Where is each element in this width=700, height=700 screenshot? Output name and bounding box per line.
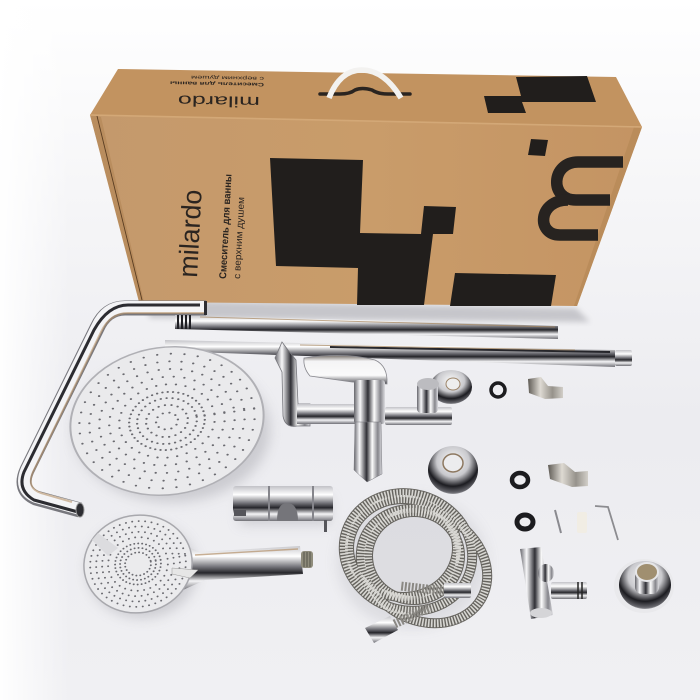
box front face xyxy=(90,115,642,306)
slider bracket xyxy=(233,486,333,532)
hand shower head xyxy=(75,506,201,622)
shadows of parts xyxy=(74,358,487,628)
flange 2 xyxy=(428,446,478,494)
hand shower nozzles xyxy=(83,514,193,614)
rain shower head xyxy=(60,334,274,508)
black graphic: top flap block xyxy=(484,76,596,113)
hand shower handle xyxy=(183,545,313,590)
box top flap xyxy=(90,69,642,127)
faucet right handle xyxy=(417,378,460,413)
rubber washer 3 xyxy=(517,515,533,529)
flap text: Смеситель для ванны xyxy=(170,79,264,87)
big m logo xyxy=(528,139,623,235)
front product text: с верхним душем xyxy=(232,197,247,279)
flap text: milardo xyxy=(178,92,260,110)
faucet body xyxy=(354,380,385,424)
nickel fitting 1 xyxy=(528,377,563,399)
wall plug xyxy=(577,512,587,533)
lower long rod xyxy=(165,340,632,367)
nickel fitting 2 xyxy=(548,463,588,487)
front product text: Смеситель для ванны xyxy=(218,174,234,279)
flange behind faucet xyxy=(430,370,472,404)
faucet horizontal pipe xyxy=(297,404,359,424)
t-piece diverter xyxy=(520,547,587,619)
hose end fittings xyxy=(365,583,471,643)
spray nozzles xyxy=(71,343,263,499)
rubber washer 1 xyxy=(491,383,505,397)
rubber washer 2 xyxy=(512,473,528,487)
large flange xyxy=(614,559,674,613)
allen key xyxy=(595,506,618,540)
handle slot and handle xyxy=(320,70,410,98)
faucet right pipe xyxy=(385,407,452,425)
faucet spout xyxy=(354,422,382,482)
front brand text: milardo xyxy=(173,189,208,278)
black graphic: large block xyxy=(270,158,456,305)
bracket of swivel spout xyxy=(275,342,310,426)
flexible shower hose xyxy=(327,475,508,646)
flap text xyxy=(170,74,264,110)
box shadow xyxy=(142,300,590,322)
black graphic: lower block xyxy=(450,273,556,306)
upper slide rod xyxy=(175,315,558,339)
front product text xyxy=(218,174,247,279)
flap text: с верхним душем xyxy=(190,74,264,81)
faucet lever xyxy=(304,355,387,384)
screw xyxy=(555,510,561,533)
curved shower arm xyxy=(22,301,207,517)
cardboard box xyxy=(90,69,642,306)
